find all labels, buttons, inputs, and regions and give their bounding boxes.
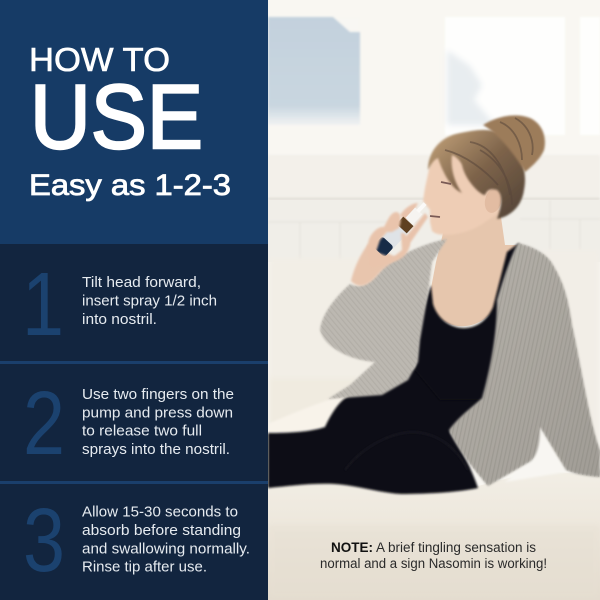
step 1 text: Tilt head forward, [82,275,201,291]
window sill [268,196,600,200]
step 1 text [82,275,217,328]
step 1 text: insert spray 1/2 inch [82,294,217,310]
panel: steps background [0,244,268,600]
number 2: 2 [23,374,65,474]
mattress [268,472,600,600]
right-hand bed highlight [508,434,559,481]
back fingers [400,203,428,246]
hair [428,130,525,219]
step 3 text: absorb before standing [82,523,241,539]
step 2 text: to release two full [82,424,202,440]
note text [320,540,547,571]
knee shadow line [345,432,468,470]
eye and lips [430,182,451,217]
black tank top [415,243,525,400]
step 2 text: pump and press down [82,405,233,421]
headboard and pillows [268,262,598,438]
step 1 [22,255,217,355]
step 3 [23,491,250,591]
step 2 text: sprays into the nostril. [82,442,230,458]
bottle [373,202,427,257]
note text: NOTE: A brief tingling sensation is [331,540,536,555]
forearm [351,244,398,286]
brick wall [268,200,600,262]
right window [445,17,600,135]
panel: heading [0,0,268,244]
hair strands [444,118,534,188]
note text: normal and a sign Nasomin is working! [320,556,547,571]
cardigan right side [449,243,600,486]
step 3 text: and swallowing normally. [82,541,250,557]
cardigan left side and sleeve [320,239,447,399]
step 3 text: Rinse tip after use. [82,560,207,576]
hand and spray bottle [367,202,428,268]
step 1 text: into nostril. [82,312,157,328]
title: use: USE [30,67,203,168]
left window [268,17,360,125]
photo: woman using nasal spray on bed [268,0,600,600]
step 2 text: Use two fingers on the [82,387,234,403]
fingers and palm [367,212,410,268]
title: how to: HOW TO [29,42,170,79]
subtitle: Easy as 1-2-3 [29,169,231,202]
step 3 text [82,505,250,576]
face [423,150,503,235]
number 1: 1 [22,255,64,355]
chest and neck skin [428,210,518,326]
step 2 text [82,387,234,458]
legs [268,366,482,496]
number 3: 3 [23,491,65,591]
ear [485,190,501,213]
white blanket edge [277,399,341,422]
hair bun [483,115,545,172]
step 2 [23,374,234,474]
step 3 text: Allow 15-30 seconds to [82,505,238,521]
